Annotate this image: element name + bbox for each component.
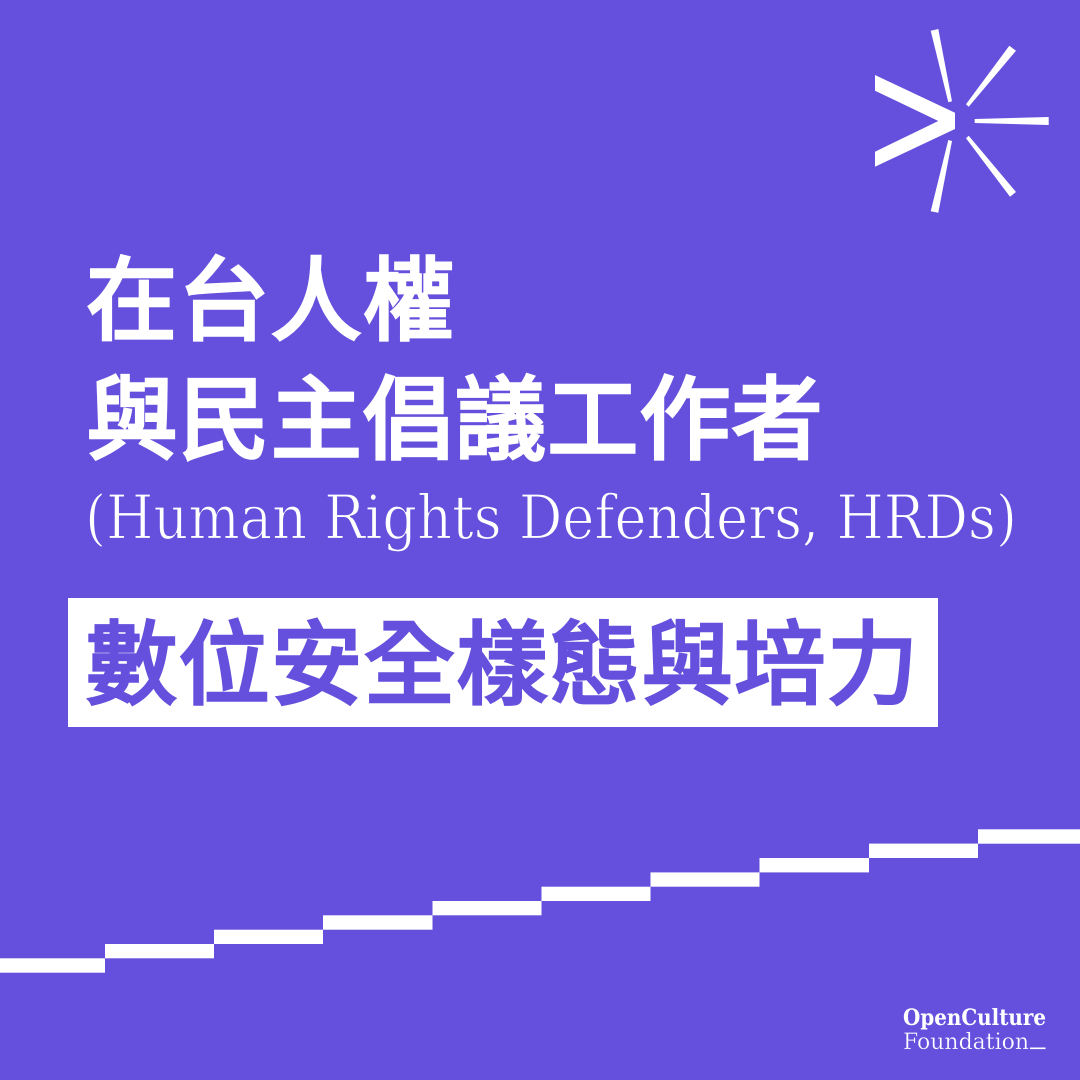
title: second line: 與民主倡議工作者	[86, 346, 822, 478]
banner: white highlighted heading: 數位安全樣態與培力	[86, 592, 918, 724]
logo: OpenCulture Foundation: Foundation	[903, 1030, 1029, 1055]
icon: spark logo	[875, 29, 1049, 213]
logo: OpenCulture Foundation: OpenCulture	[903, 1005, 1046, 1031]
logo: OpenCulture Foundation	[903, 1005, 1046, 1055]
staircase line	[0, 829, 1080, 973]
title: first line: 在台人權	[86, 228, 454, 360]
